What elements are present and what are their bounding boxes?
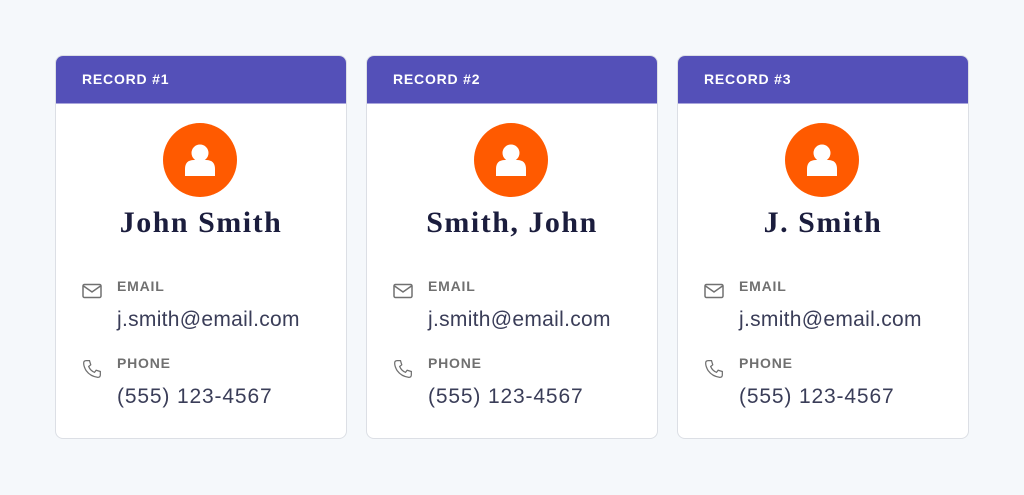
icon: email: [393, 284, 413, 298]
icon: avatar: [474, 123, 548, 197]
phone value: (555) 123-4567: [117, 385, 273, 408]
icon: phone: [394, 360, 412, 378]
header: RECORD #2: [393, 71, 480, 87]
icon: email: [82, 284, 102, 298]
name: Smith, John: [426, 206, 598, 239]
header: [56, 56, 346, 104]
phone label: PHONE: [739, 355, 793, 371]
header: [678, 56, 968, 104]
email label: EMAIL: [739, 278, 787, 294]
icon: phone: [83, 360, 101, 378]
email label: EMAIL: [117, 278, 165, 294]
phone label: PHONE: [117, 355, 171, 371]
header: RECORD #1: [82, 71, 169, 87]
phone value: (555) 123-4567: [428, 385, 584, 408]
email value: j.smith@email.com: [428, 308, 611, 331]
icon: avatar: [785, 123, 859, 197]
name: J. Smith: [764, 206, 882, 239]
icon: email: [704, 284, 724, 298]
card: record 2: [366, 55, 658, 439]
header: RECORD #3: [704, 71, 791, 87]
header: [367, 56, 657, 104]
phone value: (555) 123-4567: [739, 385, 895, 408]
icon: avatar: [163, 123, 237, 197]
email value: j.smith@email.com: [739, 308, 922, 331]
email label: EMAIL: [428, 278, 476, 294]
name: John Smith: [120, 206, 282, 239]
card: record 3: [677, 55, 969, 439]
card: record 1: [55, 55, 347, 439]
phone label: PHONE: [428, 355, 482, 371]
email value: j.smith@email.com: [117, 308, 300, 331]
icon: phone: [705, 360, 723, 378]
